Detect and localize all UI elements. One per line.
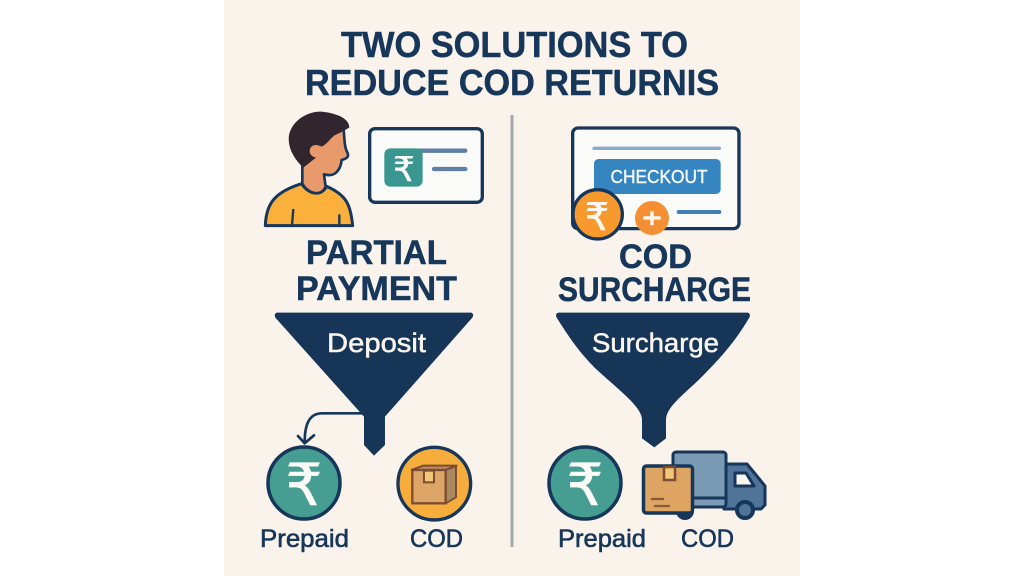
heading: cod surcharge: COD [619, 238, 692, 276]
icon: prepaid rupee coin [549, 447, 621, 519]
label: cod: COD [410, 525, 463, 553]
heading: partial payment: PAYMENT [296, 270, 457, 308]
panel: cod surcharge [549, 128, 765, 553]
heading: partial payment [296, 234, 457, 308]
panel: partial payment [260, 112, 482, 553]
icon: checkout window: ₹ [585, 195, 609, 239]
icon: delivery truck with parcel [644, 452, 765, 520]
icon: person [265, 112, 353, 226]
heading: cod surcharge [558, 238, 751, 309]
icon: prepaid rupee coin: ₹ [286, 451, 322, 519]
funnel: deposit: Deposit [327, 328, 427, 358]
icon: cod box coin [398, 447, 471, 520]
icon: checkout window: CHECKOUT [610, 166, 708, 187]
panel: background [224, 0, 800, 576]
icon: payment card [370, 129, 482, 202]
funnel: deposit [275, 313, 473, 456]
title: TWO SOLUTIONS TO [341, 24, 688, 65]
label: prepaid: Prepaid [260, 525, 349, 553]
arrow: to prepaid [298, 413, 362, 443]
icon: prepaid rupee coin [268, 447, 340, 519]
label: cod: COD [681, 525, 734, 553]
icon: prepaid rupee coin: ₹ [567, 451, 603, 519]
funnel: surcharge: Surcharge [592, 328, 719, 358]
title: REDUCE COD RETURNIS [305, 62, 719, 103]
title [305, 24, 719, 103]
funnel: surcharge [556, 313, 750, 447]
label: prepaid: Prepaid [558, 525, 646, 553]
rupee symbol: ₹ [393, 150, 415, 190]
heading: cod surcharge: SURCHARGE [558, 271, 751, 309]
icon: checkout window [573, 128, 739, 239]
heading: partial payment: PARTIAL [306, 234, 447, 272]
